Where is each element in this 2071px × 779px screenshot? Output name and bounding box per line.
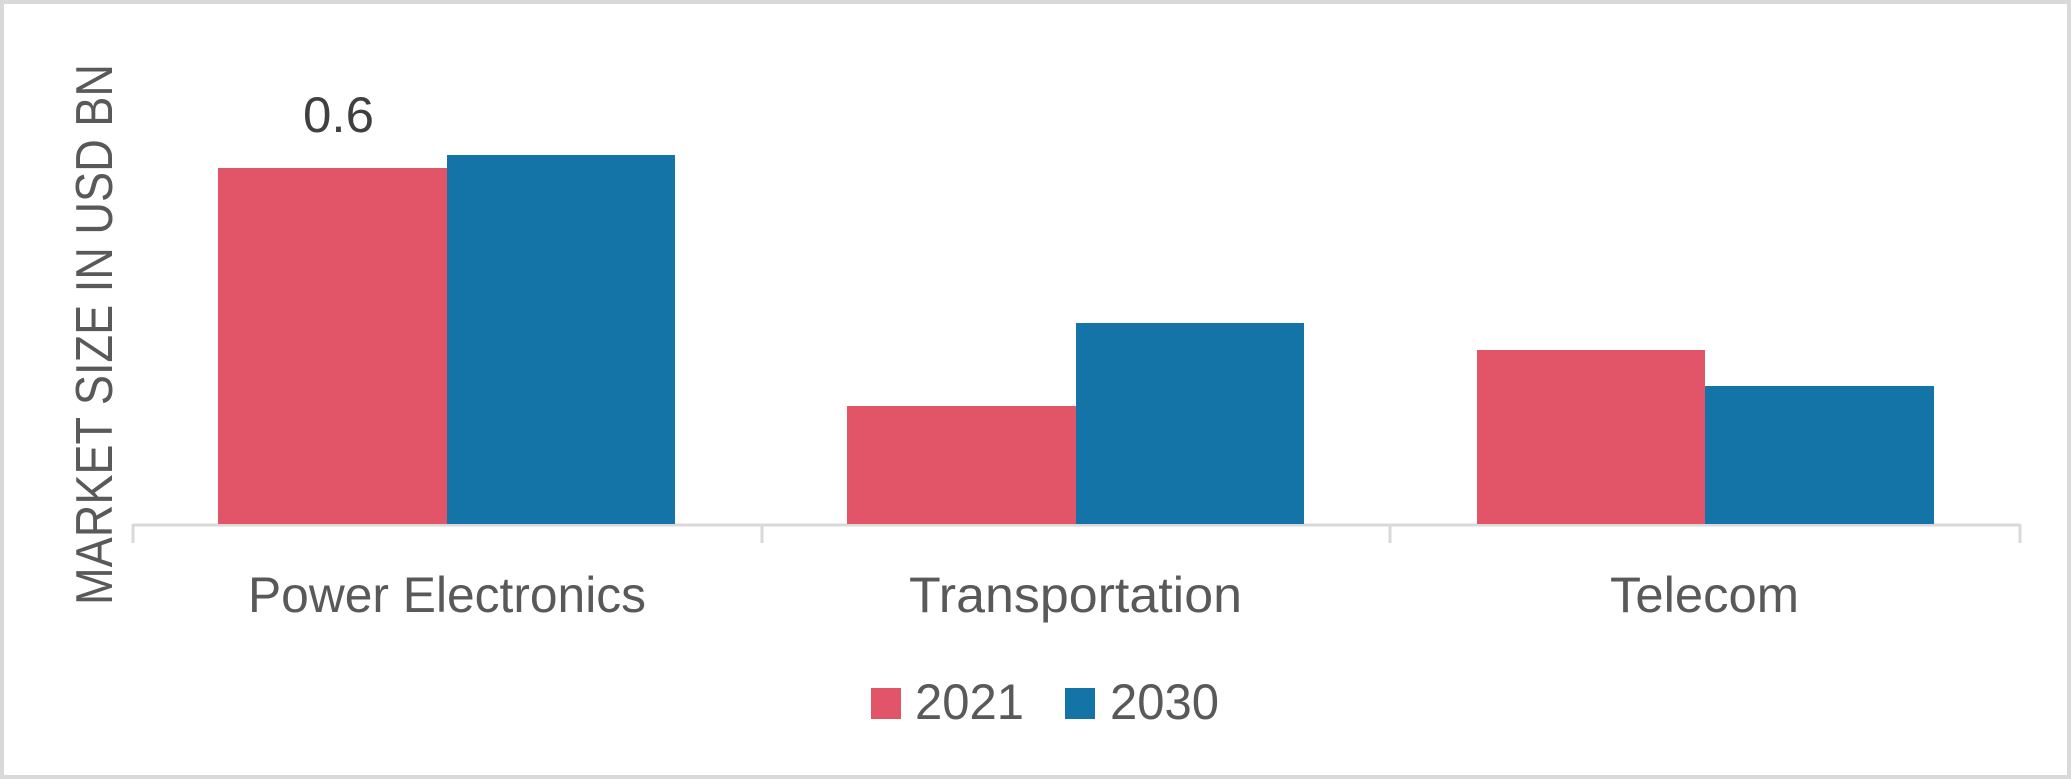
y-axis title: MARKET SIZE IN USD BN bbox=[66, 64, 124, 605]
x axis with ticks bbox=[133, 524, 2020, 543]
legend item: 2030: 2030 bbox=[1110, 674, 1219, 730]
bars: Transportation bbox=[847, 323, 1304, 524]
category label: Power Electronics: Power Electronics bbox=[248, 567, 646, 623]
bars: Power Electronics bbox=[218, 155, 675, 524]
legend bbox=[871, 674, 1219, 730]
legend item: 2030 bbox=[1065, 674, 1219, 730]
category label: Telecom: Telecom bbox=[1610, 567, 1799, 623]
bars: Telecom bbox=[1477, 350, 1934, 524]
category label: Transportation: Transportation bbox=[909, 567, 1242, 623]
data label: 0.6: 0.6 bbox=[303, 87, 374, 143]
legend item: 2021: 2021 bbox=[915, 674, 1024, 730]
